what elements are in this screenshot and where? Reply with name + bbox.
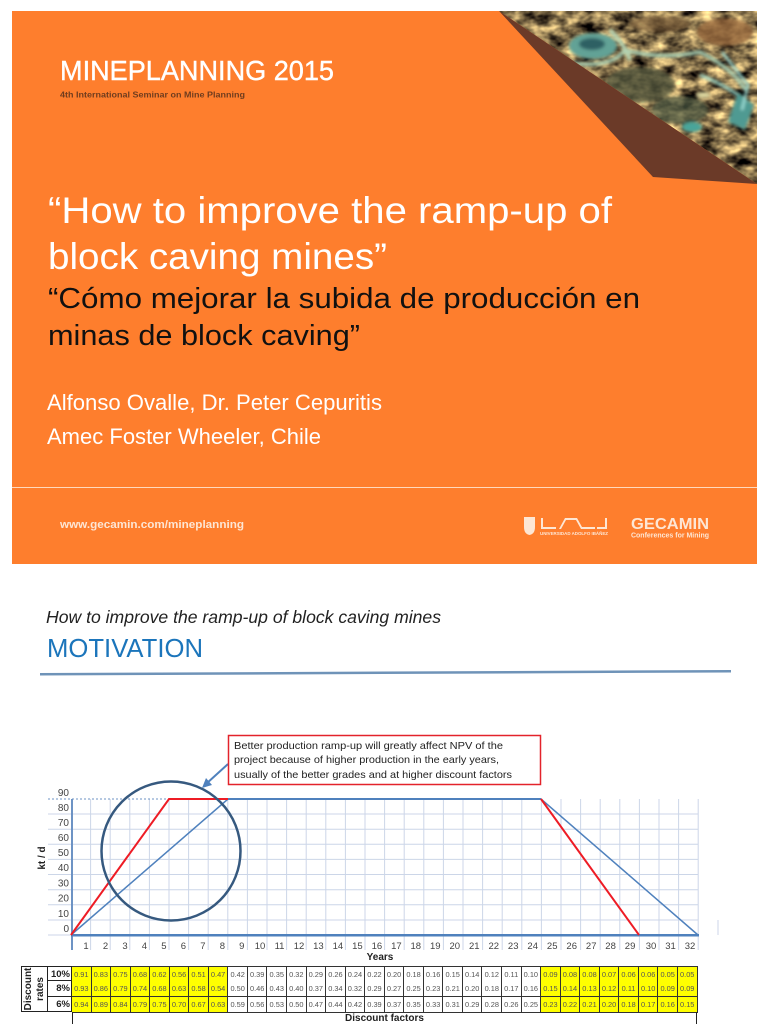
- x axis labels: 32: [685, 941, 695, 952]
- discount factors table: 0.20: [465, 984, 479, 993]
- callout: usually of the better grades and at higher discount factors: [234, 769, 512, 781]
- discount factors table: 0.07: [602, 970, 616, 979]
- discount factors table: 6%: [56, 999, 70, 1010]
- orange background panel: [12, 11, 757, 564]
- discount factors table: 0.23: [543, 1000, 558, 1009]
- discount factors table: 0.89: [94, 1000, 108, 1009]
- footer divider: [12, 487, 757, 488]
- discount factors table: Discount: [22, 968, 34, 1010]
- discount factors table: 0.20: [602, 1000, 616, 1009]
- discount factors table: 0.44: [328, 1000, 343, 1009]
- x axis labels: 10: [255, 941, 265, 952]
- y axis title: kt / d: [37, 846, 48, 870]
- discount factors table: 0.50: [230, 984, 245, 993]
- logo: gecamin: Conferences for Mining: [631, 532, 709, 540]
- discount factors table: 0.18: [485, 984, 499, 993]
- discount factors table: 0.17: [504, 984, 518, 993]
- x axis labels: 6: [181, 941, 186, 952]
- discount factors table: 0.18: [406, 970, 421, 979]
- logo: universidad adolfo ibanez: [524, 517, 608, 536]
- discount factors table: 0.39: [367, 1000, 382, 1009]
- discount factors table: [21, 966, 698, 1013]
- discount factors table: 0.93: [74, 984, 88, 993]
- discount factors table: 0.10: [524, 970, 538, 979]
- discount factors table: 0.20: [387, 970, 401, 979]
- y axis: [48, 799, 699, 950]
- discount factors table: 0.18: [621, 1000, 636, 1009]
- discount factors table: 0.27: [387, 984, 401, 993]
- discount factors table: 0.25: [524, 1000, 538, 1009]
- authors: Alfonso Ovalle, Dr. Peter Cepuritis: [47, 390, 382, 415]
- english title: [48, 190, 613, 277]
- discount factors table: 0.08: [582, 970, 597, 979]
- base case line: [71, 799, 698, 935]
- arrow to circle: [202, 764, 228, 788]
- x axis labels: 12: [294, 941, 304, 952]
- discount factors table: 0.05: [660, 970, 675, 979]
- discount factors table: 0.54: [211, 984, 225, 993]
- discount factors table: 0.83: [94, 970, 108, 979]
- discount factors table: 0.28: [485, 1000, 499, 1009]
- discount factors table: 0.16: [660, 1000, 675, 1009]
- x axis labels: 28: [605, 941, 616, 952]
- discount factors table: 0.40: [289, 984, 303, 993]
- heading rule: [40, 670, 731, 676]
- discount factors table: 0.12: [602, 984, 616, 993]
- x axis labels: 8: [220, 941, 225, 952]
- discount factors table: 0.15: [543, 984, 558, 993]
- discount factors table: 0.21: [445, 984, 460, 993]
- x axis title: Years: [367, 952, 394, 963]
- discount factors table: 0.32: [348, 984, 362, 993]
- discount factors table: 0.62: [152, 970, 167, 979]
- x axis labels: 26: [566, 941, 577, 952]
- discount factors table: 0.17: [641, 1000, 655, 1009]
- discount factors table: 0.11: [504, 970, 518, 979]
- x axis labels: 11: [275, 941, 284, 952]
- discount factors table: 0.14: [465, 970, 479, 979]
- discount factors table: 0.63: [172, 984, 186, 993]
- discount factors table: 0.67: [191, 1000, 206, 1009]
- discount factors table: 0.53: [270, 1000, 284, 1009]
- discount factors table: 0.15: [445, 970, 460, 979]
- discount factors table: 0.22: [563, 1000, 577, 1009]
- x axis labels: 17: [391, 941, 402, 952]
- y axis labels: 90: [58, 788, 69, 799]
- discount factors table: 0.21: [582, 1000, 597, 1009]
- discount factors table: 0.33: [426, 1000, 440, 1009]
- discount factors table: 0.35: [270, 970, 284, 979]
- improved ramp-up line: [71, 799, 228, 935]
- y axis labels: 40: [58, 863, 69, 874]
- discount factors table: 0.06: [641, 970, 655, 979]
- x axis labels: 5: [161, 941, 167, 952]
- satellite photo of mine: [499, 11, 757, 184]
- discount factors table: 0.68: [152, 984, 167, 993]
- discount factors table: 0.16: [426, 970, 440, 979]
- y axis labels: 30: [58, 878, 69, 890]
- discount factors caption: Discount factors: [345, 1013, 424, 1024]
- authors: [47, 390, 382, 449]
- slide 1: title slide: [12, 11, 757, 564]
- discount factors table: 0.13: [582, 984, 597, 993]
- y axis labels: 60: [58, 833, 69, 844]
- discount factors table: 0.29: [309, 970, 323, 979]
- discount factors table: 0.47: [211, 970, 225, 979]
- discount factors table: 0.25: [406, 984, 421, 993]
- discount factors table: 0.74: [133, 984, 147, 993]
- discount factors table: 10%: [51, 969, 70, 980]
- x axis labels: 4: [142, 941, 147, 952]
- x axis labels: 1: [83, 941, 89, 952]
- x axis labels: 20: [450, 941, 460, 952]
- discount factors table: 0.22: [367, 970, 382, 979]
- discount factors table: 8%: [56, 983, 70, 994]
- x axis labels: 15: [352, 941, 363, 952]
- callout: Better production ramp-up will greatly affect NPV of the: [234, 740, 503, 752]
- discount factors table: 0.68: [133, 970, 147, 979]
- y axis labels: 50: [58, 848, 69, 859]
- x axis labels: 13: [313, 941, 324, 952]
- discount factors table: 0.24: [348, 970, 362, 979]
- x axis labels: 21: [469, 941, 480, 952]
- y axis labels: 70: [58, 818, 69, 829]
- x axis labels: 18: [411, 941, 421, 952]
- discount factors table: 0.11: [622, 984, 636, 993]
- x axis labels: 7: [200, 941, 206, 952]
- y axis labels: 20: [58, 894, 69, 904]
- y axis labels: [58, 788, 69, 935]
- discount factors table: 0.29: [367, 984, 382, 993]
- discount factors table: 0.47: [309, 1000, 323, 1009]
- discount factors caption: [72, 1012, 697, 1024]
- discount factors table: 0.32: [289, 970, 303, 979]
- discount factors table: 0.37: [309, 984, 323, 993]
- y axis labels: 80: [58, 803, 69, 814]
- english title: “How to improve the ramp-up of: [48, 190, 613, 231]
- brown diagonal band: [499, 11, 757, 184]
- improved ramp-down line: [541, 799, 639, 935]
- discount factors table: 0.29: [465, 1000, 479, 1009]
- discount factors table: rates: [34, 977, 46, 1001]
- x axis labels: [83, 941, 695, 952]
- discount factors table: 0.63: [211, 1000, 225, 1009]
- x axis labels: 19: [430, 941, 441, 952]
- discount factors table: 0.15: [680, 1000, 694, 1009]
- discount factors table: 0.37: [387, 1000, 401, 1009]
- discount factors table: 0.09: [660, 984, 675, 993]
- website url: www.gecamin.com/mineplanning: [59, 519, 244, 531]
- discount factors table: 0.50: [289, 1000, 303, 1009]
- callout: [228, 736, 540, 784]
- y axis labels: 10: [58, 909, 69, 920]
- x axis labels: 24: [527, 941, 538, 952]
- discount factors table: 0.16: [524, 984, 538, 993]
- discount factors table: 0.42: [230, 970, 245, 979]
- logo: gecamin: GECAMIN: [631, 516, 709, 533]
- x axis labels: 22: [489, 941, 499, 952]
- discount factors table: 0.06: [621, 970, 636, 979]
- discount factors table: 0.79: [113, 984, 128, 993]
- discount factors table: 0.84: [113, 1000, 128, 1009]
- discount factors table: 0.42: [348, 1000, 362, 1009]
- highlight circle: [102, 782, 240, 920]
- discount factors table: 0.56: [172, 970, 186, 979]
- discount factors table: 0.56: [250, 1000, 264, 1009]
- discount factors table: 0.31: [445, 1000, 460, 1009]
- discount factors table: 0.75: [113, 970, 128, 979]
- x axis labels: 2: [103, 941, 108, 952]
- discount factors table: 0.12: [485, 970, 499, 979]
- discount factors table: 0.59: [230, 1000, 245, 1009]
- conference subtitle: 4th International Seminar on Mine Planning: [60, 90, 245, 100]
- discount factors table: 0.70: [172, 1000, 186, 1009]
- discount factors table: 0.09: [543, 970, 558, 979]
- discount factors table: 0.51: [191, 970, 206, 979]
- discount factors table: 0.75: [152, 1000, 167, 1009]
- logo: universidad adolfo ibanez: UNIVERSIDAD ADOLFO IBÁÑEZ: [540, 530, 608, 536]
- x axis labels: 29: [625, 941, 635, 952]
- spanish title: [48, 283, 640, 352]
- x axis labels: 23: [508, 941, 518, 952]
- x axis labels: 14: [333, 941, 343, 952]
- spanish title: “Cómo mejorar la subida de producción en: [48, 283, 640, 315]
- discount factors table: 0.86: [94, 984, 108, 993]
- y axis labels: 0: [63, 924, 69, 935]
- discount factors table: 0.10: [641, 984, 655, 993]
- discount factors table: 0.26: [328, 970, 343, 979]
- discount factors table: 0.05: [680, 970, 694, 979]
- english title: block caving mines”: [48, 236, 387, 277]
- authors: Amec Foster Wheeler, Chile: [47, 424, 321, 449]
- spanish title: minas de block caving”: [48, 320, 360, 352]
- discount factors table: 0.35: [406, 1000, 421, 1009]
- x axis labels: 27: [586, 941, 596, 952]
- discount factors table: 0.91: [74, 970, 88, 979]
- discount factors table: 0.08: [563, 970, 577, 979]
- discount factors table: 0.43: [270, 984, 284, 993]
- discount factors table: 0.23: [426, 984, 440, 993]
- conference name: MINEPLANNING 2015: [60, 55, 334, 86]
- x axis labels: 25: [547, 941, 557, 952]
- discount factors table: 0.14: [563, 984, 577, 993]
- x axis labels: 9: [239, 941, 244, 952]
- discount factors table: 0.46: [250, 984, 264, 993]
- discount factors table: 0.34: [328, 984, 343, 993]
- x axis labels: 30: [646, 941, 656, 952]
- discount factors table: 0.26: [504, 1000, 518, 1009]
- discount factors table: 0.39: [250, 970, 264, 979]
- x axis labels: 3: [122, 941, 128, 952]
- x axis labels: 16: [372, 941, 382, 952]
- logo: gecamin: [631, 516, 709, 540]
- callout: project because of higher production in the early years,: [234, 754, 499, 766]
- discount factors table: 0.58: [191, 984, 206, 993]
- heading: motivation: MOTIVATION: [47, 633, 203, 663]
- discount factors table: 0.79: [133, 1000, 147, 1009]
- x axis labels: 31: [665, 941, 676, 952]
- discount factors table: 0.94: [74, 1000, 88, 1009]
- chart: production ramp-up: [37, 782, 718, 963]
- slide subtitle: How to improve the ramp-up of block caving mines: [46, 607, 441, 627]
- discount factors table: 0.09: [680, 984, 694, 993]
